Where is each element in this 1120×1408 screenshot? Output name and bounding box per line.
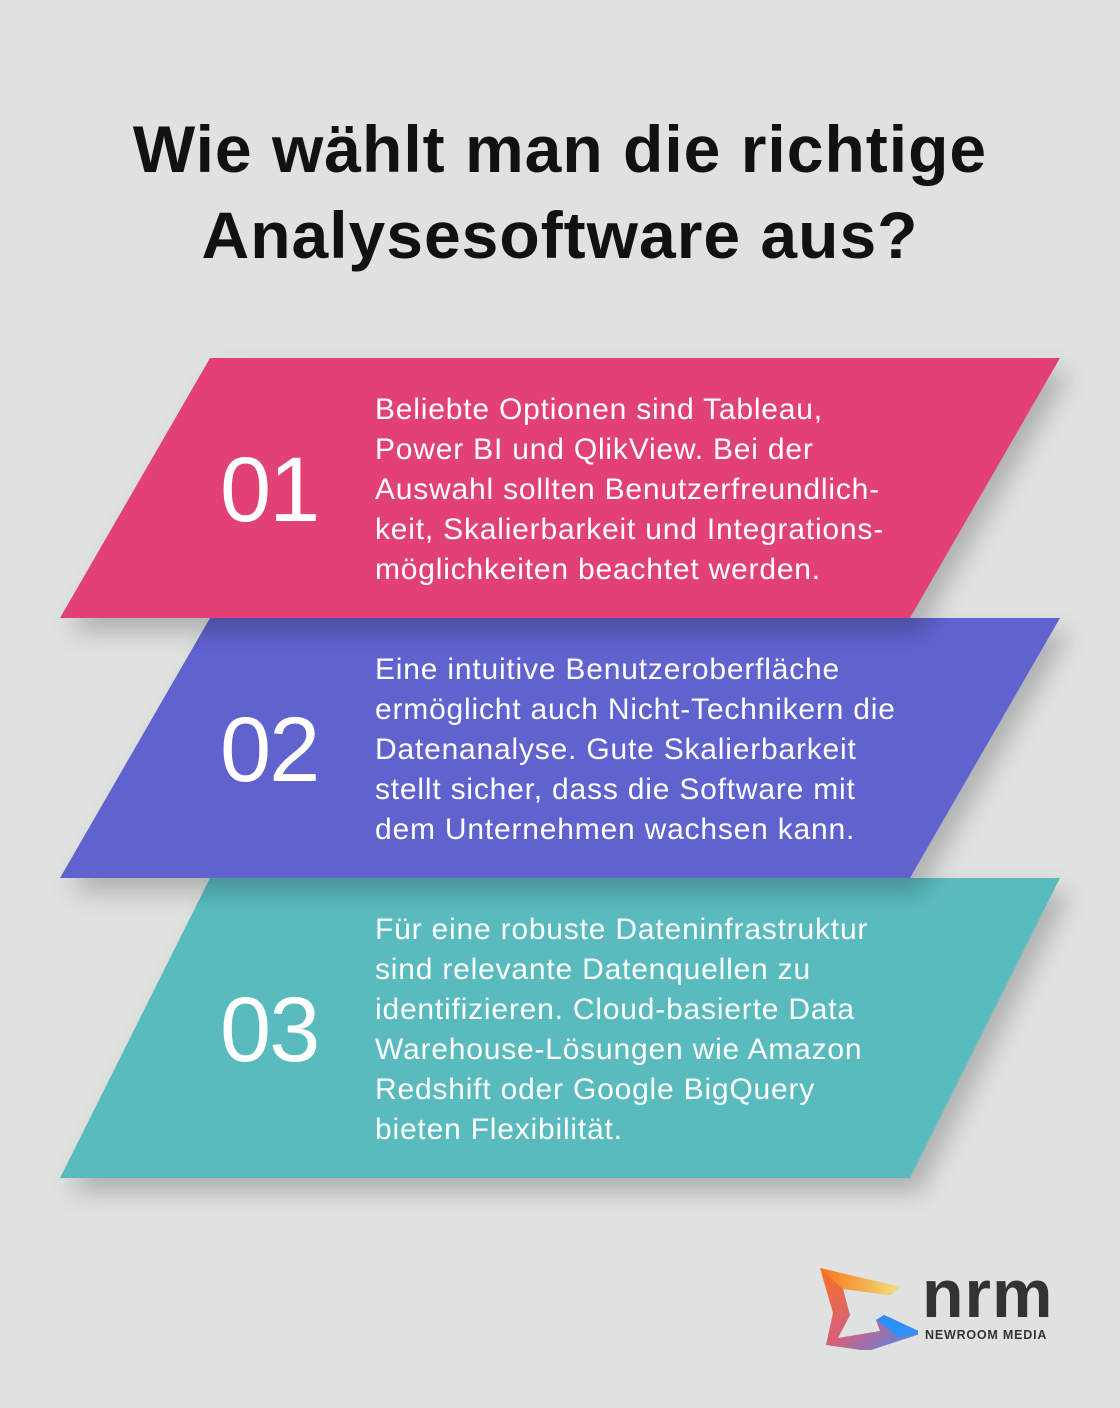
text 2: Datenanalyse. Gute Skalierbarkeit bbox=[375, 733, 857, 766]
text 3: sind relevante Datenquellen zu bbox=[375, 953, 811, 986]
panel 1 bbox=[220, 393, 884, 586]
title: Analysesoftware aus? bbox=[202, 198, 918, 272]
text 3: Redshift oder Google BigQuery bbox=[375, 1073, 815, 1106]
icon: logo mark bbox=[820, 1268, 918, 1350]
number 01: 01 bbox=[220, 439, 318, 541]
text 1: möglichkeiten beachtet werden. bbox=[375, 553, 821, 586]
panel 3 bbox=[220, 913, 868, 1146]
text 3: identifizieren. Cloud-basierte Data bbox=[375, 993, 855, 1026]
title: Wie wählt man die richtige bbox=[133, 112, 987, 186]
logo: NEWROOM MEDIA bbox=[925, 1328, 1047, 1342]
text 2 bbox=[375, 653, 896, 846]
text 1: Power BI und QlikView. Bei der bbox=[375, 433, 814, 466]
text 1: keit, Skalierbarkeit und Integrations- bbox=[375, 513, 884, 546]
panel 2 bbox=[220, 653, 896, 846]
number 02: 02 bbox=[220, 699, 318, 801]
text 1: Auswahl sollten Benutzerfreundlich- bbox=[375, 473, 880, 506]
text 2: stellt sicher, dass die Software mit bbox=[375, 773, 856, 806]
text 2: Eine intuitive Benutzeroberfläche bbox=[375, 653, 840, 686]
text 3 bbox=[375, 913, 868, 1146]
text 1: Beliebte Optionen sind Tableau, bbox=[375, 393, 823, 426]
text 3: bieten Flexibilität. bbox=[375, 1113, 623, 1146]
logo text: nrm bbox=[922, 1256, 1053, 1332]
text 1 bbox=[375, 393, 884, 586]
logo bbox=[820, 1256, 1053, 1350]
text 3: Für eine robuste Dateninfrastruktur bbox=[375, 913, 868, 946]
text 3: Warehouse-Lösungen wie Amazon bbox=[375, 1033, 862, 1066]
text 2: dem Unternehmen wachsen kann. bbox=[375, 813, 855, 846]
number 03: 03 bbox=[220, 979, 318, 1081]
text 2: ermöglicht auch Nicht-Technikern die bbox=[375, 693, 896, 726]
title bbox=[133, 112, 987, 272]
